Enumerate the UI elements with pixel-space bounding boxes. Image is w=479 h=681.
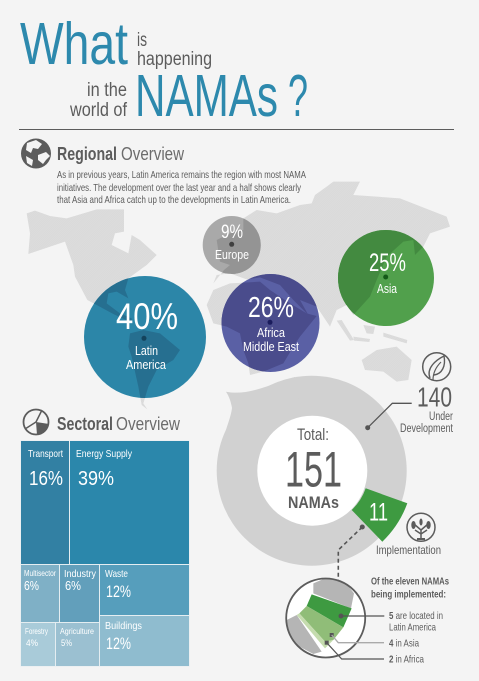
- sector: industry: [60, 565, 99, 622]
- heading: regional overview: Overview: [121, 144, 185, 164]
- sector: transport: 16%: [29, 468, 63, 490]
- bubble: Asia 25%: 25%: [369, 249, 406, 277]
- implementation breakdown text: 2 in Africa: [389, 654, 424, 666]
- title: world of: [69, 100, 128, 121]
- title: ?: [288, 63, 308, 129]
- icon: tree: [407, 513, 435, 541]
- sector: transport: Transport: [28, 448, 63, 460]
- title: happening: [137, 49, 212, 70]
- implementation breakdown text: 5 are located in: [389, 610, 443, 622]
- title: NAMAs: [135, 63, 278, 129]
- bubble: Asia 25%: [338, 230, 434, 326]
- regional overview text: [57, 169, 306, 206]
- sector: multisector: Multisector: [24, 569, 56, 578]
- implementation breakdown text: Latin America: [389, 622, 436, 634]
- heading: sectoral overview: Sectoral: [57, 414, 113, 434]
- sector: waste: Waste: [105, 568, 128, 580]
- sector: waste: [100, 565, 189, 615]
- sector: agriculture: Agriculture: [60, 627, 94, 636]
- sector: multisector: [21, 565, 59, 622]
- heading: sectoral overview: [57, 414, 181, 434]
- heading: of the eleven NAMAs: [371, 576, 449, 600]
- sector: transport: [21, 441, 69, 564]
- bubble: Europe 9%: 9%: [221, 222, 243, 243]
- sector: industry: Industry: [64, 568, 97, 580]
- sector: energy supply: 39%: [78, 468, 114, 490]
- sector: multisector: 6%: [24, 578, 39, 593]
- bubble: Latin America 40%: America: [126, 357, 167, 372]
- bubble: Latin America 40%: [84, 276, 206, 398]
- icon: leaf: [423, 353, 451, 381]
- bubble: Africa Middle East 26%: Middle East: [243, 339, 299, 354]
- donut: total NAMAs: [217, 376, 407, 566]
- sector: buildings: Buildings: [105, 620, 142, 632]
- icon: sector pie: [24, 410, 49, 435]
- regional overview text: that Asia and Africa catch up to the developments in Latin America.: [57, 194, 291, 206]
- callout: under development: 140: [417, 382, 452, 413]
- bubble: Latin America 40%: Latin: [135, 343, 158, 358]
- sector: buildings: [100, 616, 189, 666]
- heading: regional overview: Regional: [57, 144, 117, 164]
- sector: forestry: 4%: [26, 638, 38, 648]
- world map: [27, 182, 450, 409]
- bubble: Europe 9%: Europe: [215, 248, 249, 262]
- heading: regional overview: [57, 144, 185, 164]
- donut: total NAMAs: Total:: [297, 425, 329, 444]
- treemap: sectors: [20, 440, 190, 666]
- sector: industry: 6%: [65, 578, 81, 593]
- icon: globe: [21, 138, 51, 168]
- bubble: Europe 9%: [202, 216, 261, 274]
- bubble: Latin America 40%: 40%: [116, 296, 178, 337]
- implementation wedge: 11: [369, 499, 388, 527]
- regional overview text: As in previous years, Latin America remains the region with most NAMA: [57, 169, 306, 181]
- bubble: Africa Middle East 26%: Africa: [257, 325, 286, 340]
- title: in the: [87, 80, 127, 101]
- callout: under development: Development: [400, 423, 454, 435]
- sector: forestry: Forestry: [25, 627, 48, 636]
- sector: energy supply: Energy Supply: [76, 448, 133, 460]
- implementation breakdown text: [389, 610, 443, 666]
- bubble: Asia 25%: Asia: [377, 282, 397, 296]
- sector: buildings: 12%: [106, 634, 131, 653]
- leader: 2 Africa: [325, 641, 384, 659]
- heading: sectoral overview: Overview: [116, 414, 181, 434]
- label: implementation: Implementation: [376, 543, 441, 557]
- bubble: Africa Middle East 26%: [222, 274, 320, 372]
- heading: of the eleven NAMAs: Of the eleven NAMAs: [371, 576, 449, 588]
- title: is: [137, 30, 147, 51]
- regional overview text: initiatives. The development over the last year and a half shows clearly: [57, 182, 302, 194]
- heading: of the eleven NAMAs: being implemented:: [371, 590, 446, 600]
- sector: forestry: [21, 623, 55, 666]
- donut: total NAMAs: 151: [285, 442, 342, 498]
- implementation breakdown text: 4 in Asia: [389, 638, 419, 650]
- callout: under development: Under: [429, 411, 453, 423]
- sector: waste: 12%: [106, 582, 131, 601]
- callout: under development: [365, 382, 454, 435]
- leader: 5 Latin America: [338, 614, 384, 618]
- leader: 4 Asia: [330, 633, 384, 643]
- title: [20, 11, 308, 129]
- implementation wedge: [352, 488, 407, 542]
- bubble: Africa Middle East 26%: 26%: [248, 292, 294, 324]
- title: What: [20, 11, 128, 77]
- sector: agriculture: [56, 623, 99, 666]
- zoom detail circle: [283, 578, 365, 658]
- dashed connector: [338, 524, 365, 580]
- donut: total NAMAs: NAMAs: [288, 493, 339, 512]
- sector: energy supply: [70, 441, 189, 564]
- sector: agriculture: 5%: [61, 638, 72, 648]
